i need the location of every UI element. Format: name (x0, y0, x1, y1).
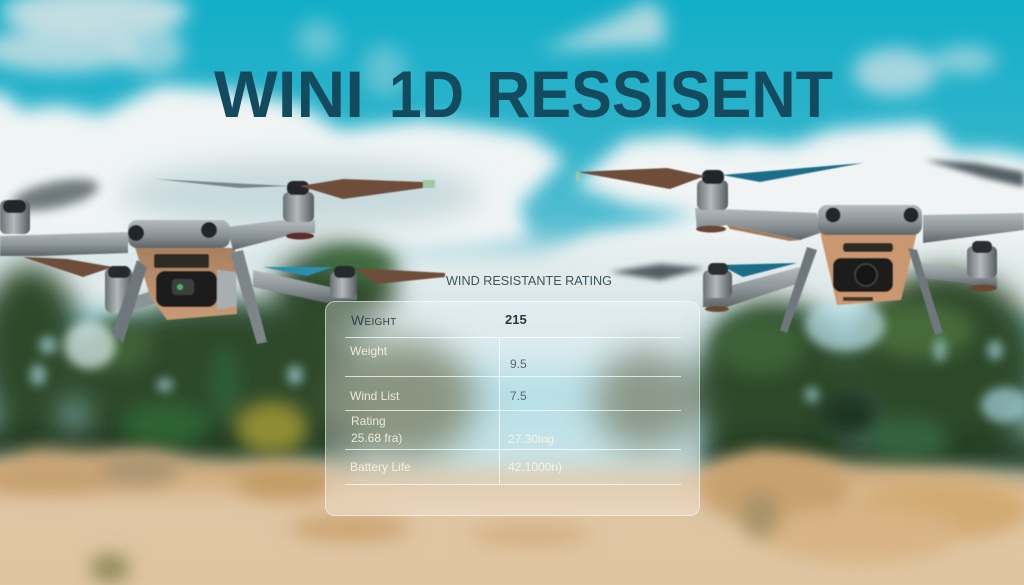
title: RESSISENT (486, 57, 833, 131)
dry ground (0, 448, 1024, 585)
row 1 label: Weight (351, 312, 397, 328)
drone: right (576, 160, 1024, 335)
rear blue blades (720, 263, 797, 277)
row 4 label (351, 414, 402, 445)
title: WINI (214, 57, 364, 131)
panel: specification table (325, 301, 700, 516)
row 5 value: 42.1000n) (508, 460, 562, 474)
rear arms and motors (703, 241, 997, 312)
row 4 label: 25.68 fra) (351, 431, 402, 445)
row 4 label: Rating (351, 414, 386, 428)
row 3 value: 7.5 (510, 389, 527, 403)
row 2 label: Weight (350, 344, 387, 358)
front propeller (155, 179, 435, 199)
row 4 value: 27.30ing (508, 432, 554, 446)
rear motors and arms (105, 266, 357, 313)
row 5 label: Battery Life (350, 460, 411, 474)
title (214, 57, 833, 131)
clouds (0, 0, 1024, 370)
trees (0, 247, 1024, 475)
rear propellers (23, 257, 445, 284)
landing gear (780, 247, 943, 335)
landing gear (112, 250, 267, 344)
front arms and shell (695, 205, 1024, 243)
camera body (820, 232, 917, 305)
row 2 value: 9.5 (510, 357, 527, 371)
front motor (697, 170, 728, 210)
blurred far propellers (610, 160, 1024, 280)
front motors (0, 181, 314, 234)
front arms and shell (0, 220, 315, 256)
row 3 label: Wind List (350, 389, 399, 403)
blurred left propeller (9, 173, 101, 217)
panel heading: WIND RESISTANTE RATING (446, 273, 612, 288)
front propeller (576, 163, 863, 189)
title: 1D (389, 57, 464, 131)
row 1 value: 215 (505, 312, 527, 327)
camera body (135, 247, 237, 320)
drone: left (0, 173, 445, 344)
